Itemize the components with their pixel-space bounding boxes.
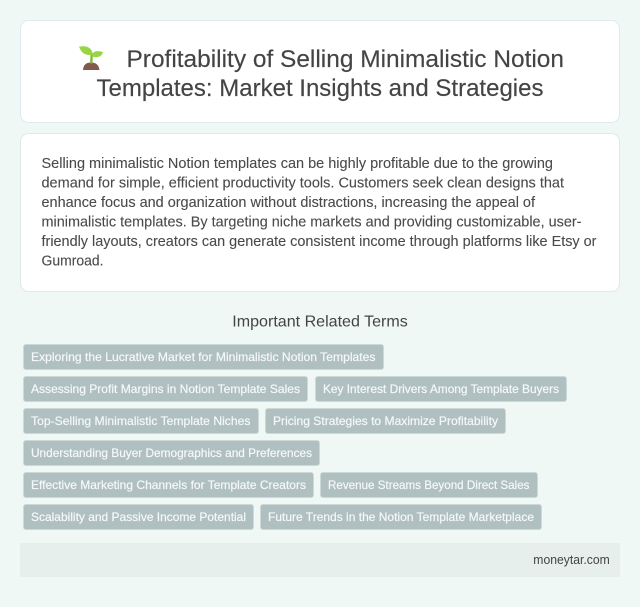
tag <box>24 440 320 466</box>
summary paragraph: Selling minimalistic Notion templates can be highly profitable due to the growing <box>42 156 553 172</box>
tag <box>24 408 258 434</box>
tag <box>24 504 254 530</box>
summary paragraph: friendly layouts, creators can generate consistent income through platforms like Etsy or <box>42 234 597 250</box>
tag <box>260 504 542 530</box>
title: Templates: Market Insights and Strategies <box>96 75 544 102</box>
summary paragraph: minimalistic templates. By targeting niche markets and providing customizable, user- <box>42 214 582 230</box>
tag: Understanding Buyer Demographics and Preferences <box>31 446 312 460</box>
tag <box>24 376 308 402</box>
tag <box>266 408 506 434</box>
summary paragraph: demand for simple, efficient productivity tools. Customers seek clean designs that <box>42 176 564 192</box>
tag <box>320 472 538 498</box>
tag: Future Trends in the Notion Template Marketplace <box>268 510 534 524</box>
panel: summary text <box>20 134 620 292</box>
footer bar <box>20 543 620 577</box>
header panel <box>20 20 620 122</box>
tag: Top-Selling Minimalistic Template Niches <box>31 414 250 428</box>
footer source: moneytar.com <box>533 553 610 567</box>
tag: Effective Marketing Channels for Template Creators <box>31 478 306 492</box>
tag <box>24 344 384 370</box>
tag <box>316 376 566 402</box>
icon: seedling <box>79 46 103 70</box>
tag: Key Interest Drivers Among Template Buyers <box>323 382 559 396</box>
summary paragraph: enhance focus and organization without distractions, increasing the appeal of <box>42 195 536 211</box>
title: Profitability of Selling Minimalistic Notion <box>126 46 564 73</box>
title <box>96 46 564 102</box>
tag: Pricing Strategies to Maximize Profitability <box>273 414 498 428</box>
tag: Revenue Streams Beyond Direct Sales <box>328 478 530 492</box>
summary paragraph: Gumroad. <box>42 254 104 270</box>
heading: related terms: Important Related Terms <box>232 314 408 331</box>
tag <box>24 472 314 498</box>
tag group: related terms <box>24 344 566 530</box>
tag: Exploring the Lucrative Market for Minimalistic Notion Templates <box>31 350 375 364</box>
tag: Scalability and Passive Income Potential <box>31 510 246 524</box>
summary paragraph <box>42 156 597 270</box>
tag: Assessing Profit Margins in Notion Template Sales <box>31 382 300 396</box>
